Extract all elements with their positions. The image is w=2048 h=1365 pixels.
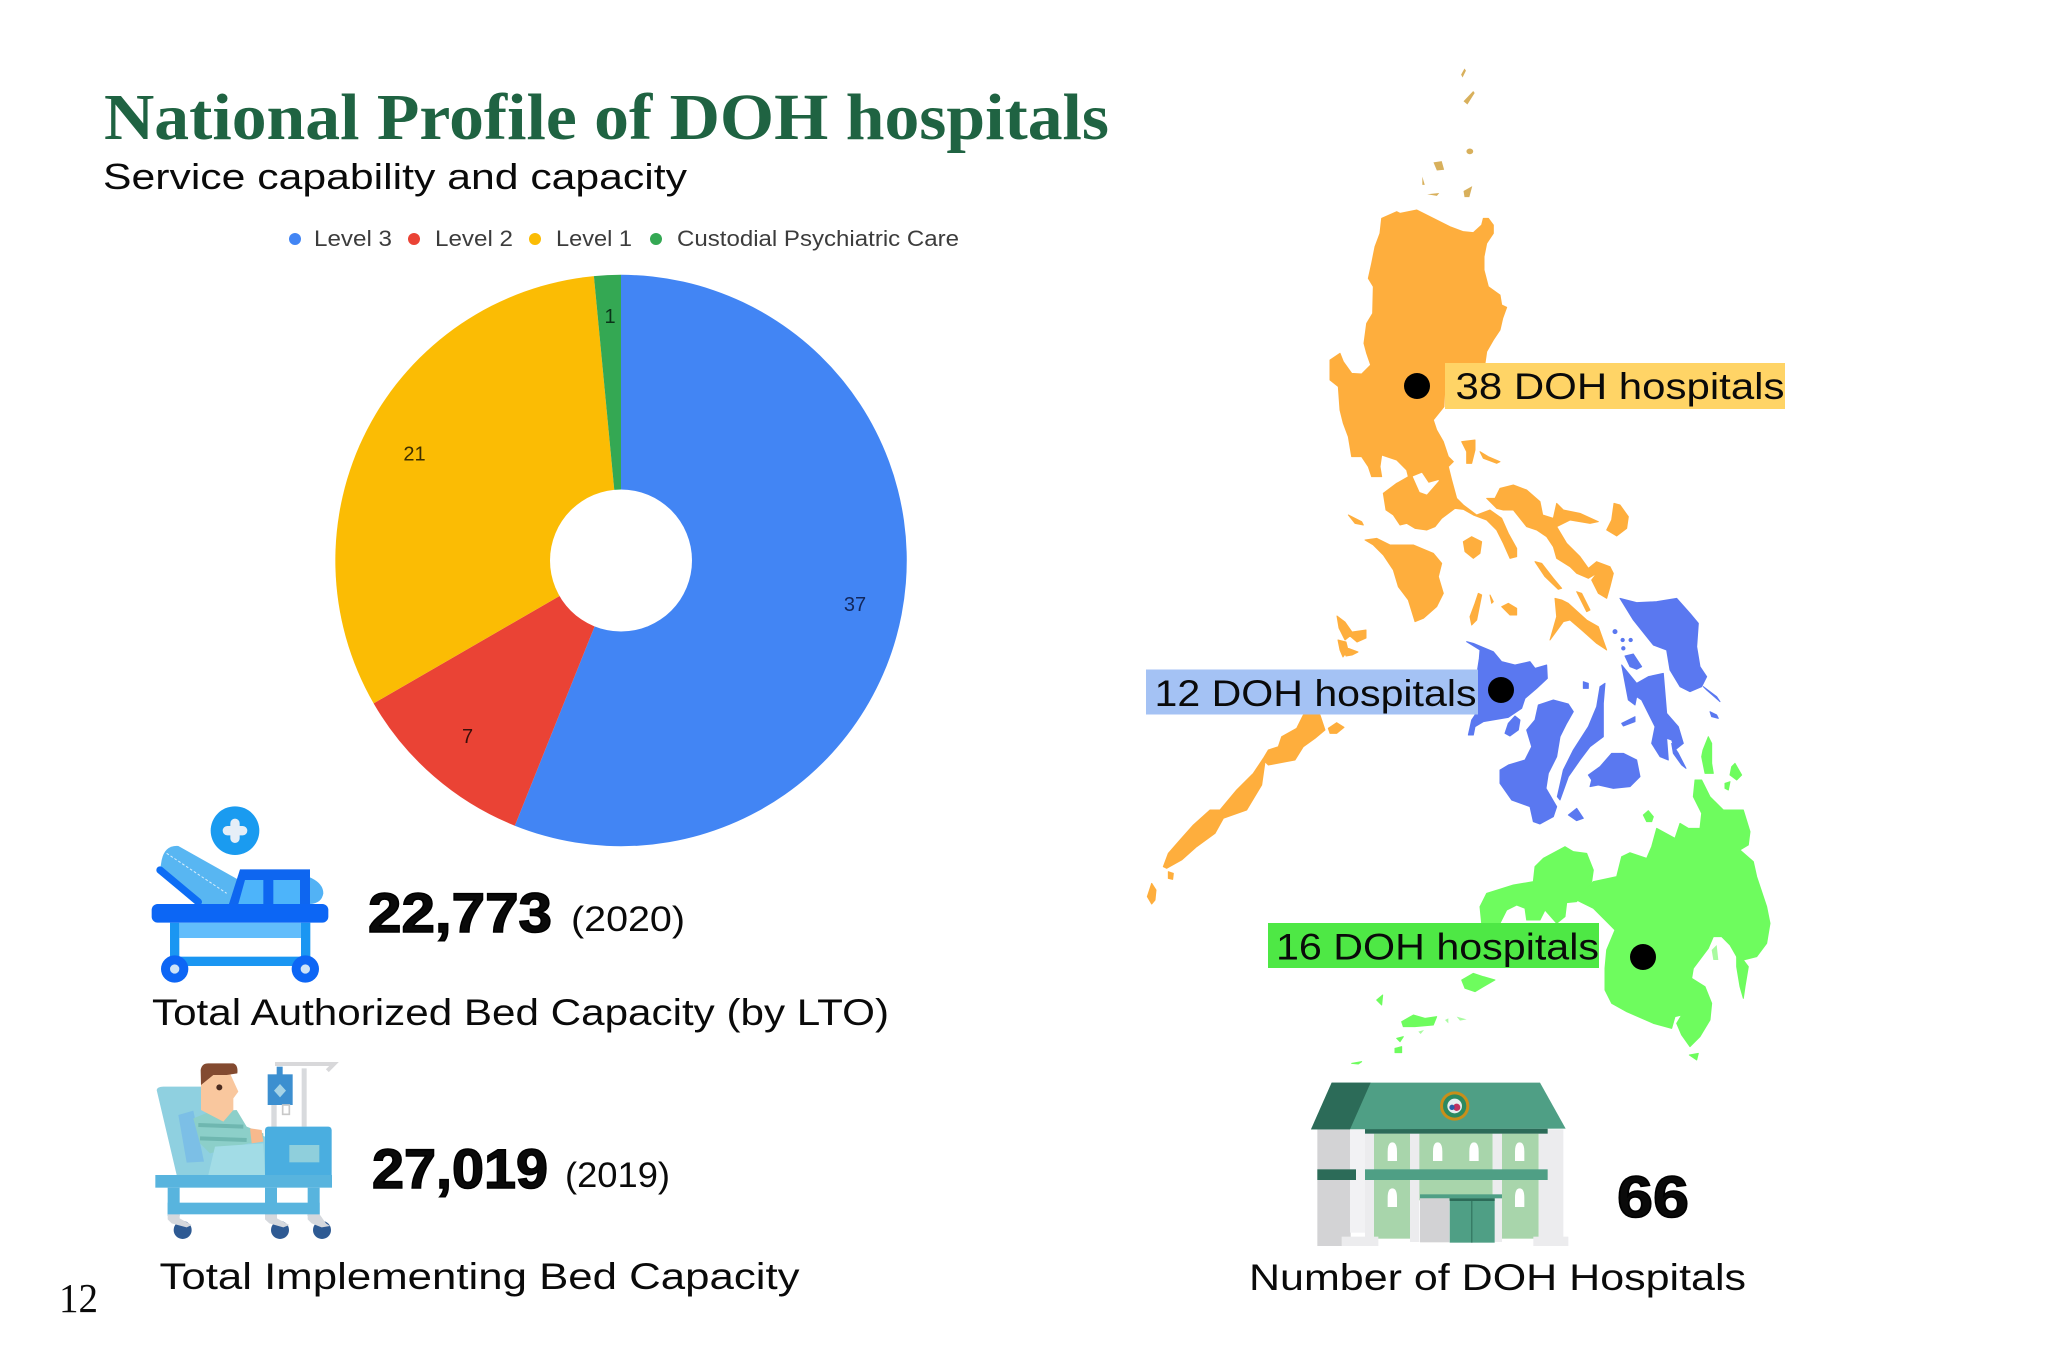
caption: number of DOH hospitals: Number of DOH Hospitals <box>1249 1257 1746 1298</box>
icon: hospital bed with medical cross <box>152 806 328 983</box>
chart legend: Level 2 <box>435 226 513 251</box>
main island of Luzon <box>1330 210 1517 558</box>
Batanes and Babuyan islets <box>1422 69 1475 197</box>
map: Luzon region, orange <box>1147 69 1628 904</box>
chart legend <box>289 226 959 251</box>
donut chart: hospitals by level: 7 <box>462 726 473 748</box>
icon: DOH hospital building <box>1311 1083 1568 1246</box>
callout: Luzon 38 DOH hospitals: 38 DOH hospitals <box>1456 366 1784 407</box>
stat: authorized bed capacity: 22,773 <box>368 881 552 944</box>
chart legend: Level 3 <box>314 226 392 251</box>
caption: authorized bed capacity: Total Authorized Bed Capacity (by LTO) <box>152 992 889 1033</box>
page number: 12 <box>59 1275 98 1321</box>
donut chart: hospitals by level: 21 <box>403 444 426 466</box>
map: Visayas region, blue <box>1467 598 1720 824</box>
Palawan <box>1147 715 1344 904</box>
stat year 2020: (2020) <box>571 900 685 939</box>
stat: implementing bed capacity: 27,019 <box>372 1137 548 1200</box>
subtitle: Service capability and capacity <box>103 156 687 197</box>
chart legend: Level 1 <box>556 226 632 251</box>
callout: Mindanao 16 DOH hospitals: 16 DOH hospitals <box>1276 926 1599 968</box>
map: Mindanao region, green <box>1352 737 1770 1064</box>
callout: Visayas 12 DOH hospitals: 12 DOH hospitals <box>1154 673 1476 714</box>
callout: Luzon 38 DOH hospitals <box>1404 363 1785 409</box>
donut chart: hospitals by level: 1 <box>604 306 616 328</box>
donut chart: hospitals by level: 37 <box>844 594 866 616</box>
chart legend: Custodial Psychiatric Care <box>677 226 959 251</box>
stat: number of DOH hospitals: 66 <box>1617 1165 1689 1230</box>
icon: patient in bed with IV drip <box>155 1063 334 1239</box>
caption: implementing bed capacity: Total Implementing Bed Capacity <box>160 1256 800 1297</box>
Calamian islands <box>1337 616 1366 657</box>
title: National Profile of DOH hospitals <box>104 81 1109 154</box>
donut chart: hospitals by level <box>335 275 907 846</box>
stat year 2019: (2019) <box>565 1156 670 1195</box>
Bicol, Mindoro and southern Luzon islands <box>1348 440 1628 650</box>
callout: Mindanao 16 DOH hospitals <box>1268 923 1656 970</box>
